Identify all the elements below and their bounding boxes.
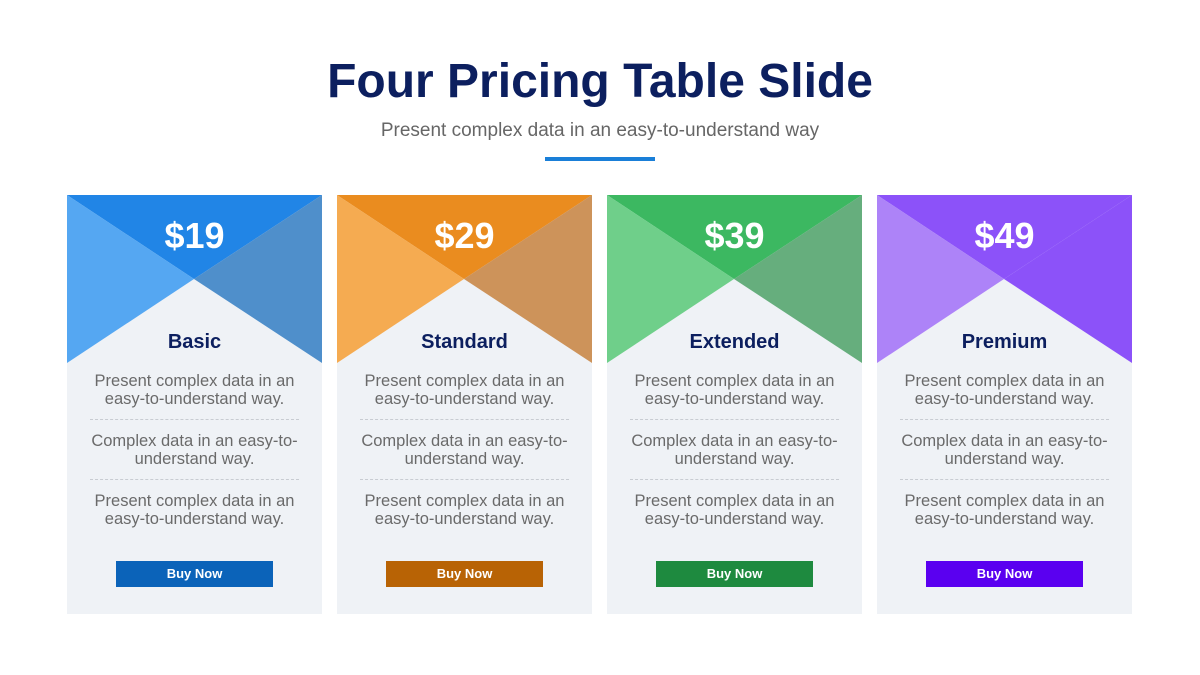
panel: extended <box>607 195 862 614</box>
features: easy-to-understand way. <box>105 390 284 408</box>
accent bar <box>545 157 655 161</box>
features: Present complex data in an <box>635 372 834 390</box>
features: easy-to-understand way. <box>645 390 824 408</box>
features: Complex data in an easy-to- <box>361 432 568 450</box>
plan name: Extended <box>689 331 780 353</box>
price: $49 <box>974 215 1035 256</box>
features: Complex data in an easy-to- <box>631 432 838 450</box>
panel: basic <box>67 195 322 614</box>
features: understand way. <box>945 450 1064 468</box>
plan name: Premium <box>962 331 1047 353</box>
features: understand way. <box>675 450 794 468</box>
features: understand way. <box>405 450 524 468</box>
panel: premium <box>877 195 1132 614</box>
button <box>926 561 1083 587</box>
price: $19 <box>164 215 225 256</box>
button: Buy Now <box>437 566 492 581</box>
features: easy-to-understand way. <box>915 390 1094 408</box>
plan name: Standard <box>421 331 508 353</box>
features: Present complex data in an <box>365 372 564 390</box>
features: Present complex data in an <box>95 492 294 510</box>
button: Buy Now <box>167 566 222 581</box>
subtitle: Present complex data in an easy-to-understand way <box>381 120 819 141</box>
button <box>656 561 813 587</box>
button: Buy Now <box>707 566 762 581</box>
features: easy-to-understand way. <box>375 390 554 408</box>
button <box>386 561 543 587</box>
button <box>116 561 273 587</box>
features: understand way. <box>135 450 254 468</box>
features <box>360 372 569 528</box>
features <box>630 372 839 528</box>
features: Complex data in an easy-to- <box>91 432 298 450</box>
features <box>900 372 1109 528</box>
price: $39 <box>704 215 765 256</box>
title: Four Pricing Table Slide <box>327 55 873 108</box>
panel: standard <box>337 195 592 614</box>
plan name: Basic <box>168 331 221 353</box>
button: Buy Now <box>977 566 1032 581</box>
features: Present complex data in an <box>95 372 294 390</box>
features: Present complex data in an <box>365 492 564 510</box>
features: easy-to-understand way. <box>375 510 554 528</box>
features: Present complex data in an <box>905 492 1104 510</box>
features <box>90 372 299 528</box>
features: easy-to-understand way. <box>645 510 824 528</box>
features: easy-to-understand way. <box>105 510 284 528</box>
features: Present complex data in an <box>905 372 1104 390</box>
features: Present complex data in an <box>635 492 834 510</box>
features: Complex data in an easy-to- <box>901 432 1108 450</box>
features: easy-to-understand way. <box>915 510 1094 528</box>
price: $29 <box>434 215 495 256</box>
